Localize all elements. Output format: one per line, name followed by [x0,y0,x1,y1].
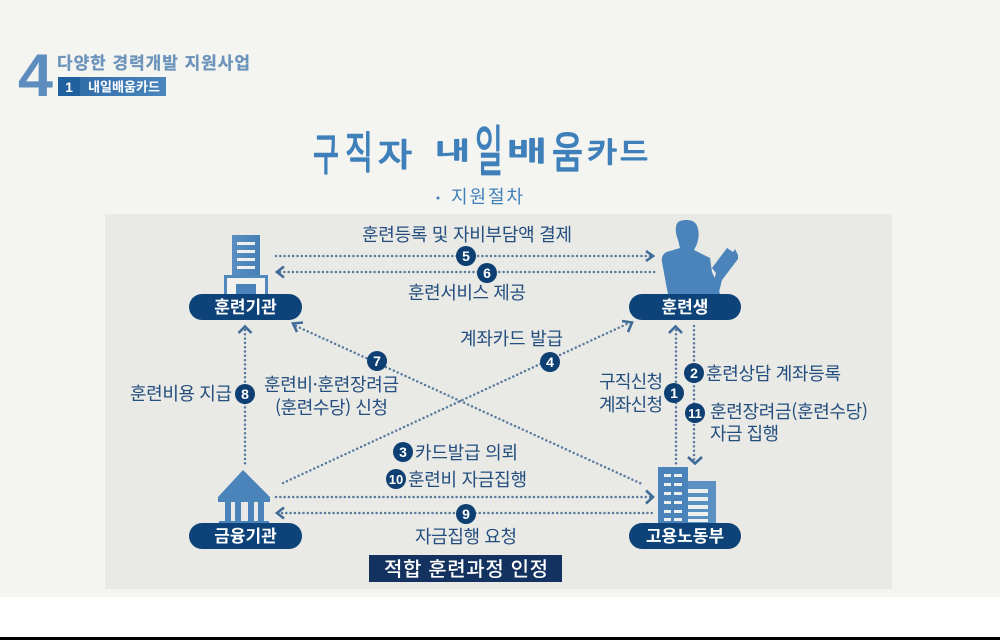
label pill: training institution: 훈련기관 [214,293,277,318]
label pill: trainee: 훈련생 [662,293,708,318]
step 9 label [415,504,517,549]
label pill: ministry of employment and labor: 고용노동부 [646,522,724,547]
arrow 5: institution to trainee [276,251,653,261]
step 3 label: 3 [399,444,407,460]
section header [18,42,250,109]
section heading: 다양한 경력개발 지원사업 [57,49,250,74]
step 7 label: 훈련비·훈련장려금 [264,371,399,397]
subtitle: 지원절차 [451,183,523,209]
step 11 label: 훈련장려금(훈련수당) [710,398,868,424]
step 1 label [599,368,684,417]
arrow 1: ministry to trainee [669,326,682,464]
step 10 label: 10 [389,472,403,487]
step 7 label: 7 [373,353,381,369]
label pill: ministry of employment and labor [629,522,741,549]
step 8 label: 훈련비용 지급 [130,380,232,406]
arrow 4: bank to trainee [283,321,632,483]
step 7 label [264,351,399,420]
title [313,107,648,187]
arrow 9: ministry to bank [277,508,655,518]
step 6 label: 6 [483,265,491,281]
step 1 label: 구직신청 [599,368,663,394]
bottom black strip [0,637,1000,640]
title: 움 [552,119,583,181]
title: 일 [475,107,503,187]
step 11 label [685,398,868,446]
label pill: training institution [189,293,302,320]
arrow 2 and 11: trainee to ministry [688,326,702,464]
arrow 8: bank to institution [238,326,252,464]
step 9 label: 9 [462,506,470,522]
label pill: trainee [629,293,741,320]
step 4 label: 계좌카드 발급 [460,325,563,351]
step 11 label: 자금 집행 [710,420,779,446]
title: 배 [507,130,547,169]
step 6 label: 훈련서비스 제공 [408,279,526,305]
subsection badge [58,76,166,96]
icon: ministry buildings [658,467,716,523]
panel: procedure diagram [105,214,892,589]
step 2 label: 2 [690,365,698,381]
title: 직 [345,117,373,181]
step 1 label: 1 [670,385,678,401]
subsection badge: 내일배움카드 [88,76,160,96]
label pill: financial institution: 금융기관 [214,522,277,547]
icon: training institution building [226,235,266,296]
step 1 label: 계좌신청 [599,391,663,417]
title: 내 [435,131,470,166]
arrow 10: bank to ministry [276,490,653,504]
step 3 label: 카드발급 의뢰 [415,439,518,465]
step 9 label: 자금집행 요청 [415,523,517,549]
title: 구 [313,119,339,183]
title: 드 [620,132,648,169]
step 4 label: 4 [546,354,554,370]
step 10 label: 훈련비 자금집행 [408,466,527,492]
step 2 label: 훈련상담 계좌등록 [706,360,841,386]
arrow 6: trainee to institution [277,266,655,278]
step 5 label: 훈련등록 및 자비부담액 결제 [362,221,572,247]
step 5 label [362,221,572,266]
icon: trainee silhouette [662,220,738,294]
step 4 label [460,325,563,372]
subsection badge: 1 [65,79,73,95]
arrow 7: ministry to institution [293,322,642,484]
icon: bank [218,470,270,523]
callout: approved training course: 적합 훈련과정 인정 [384,553,548,582]
step 11 label: 11 [688,406,702,421]
section number: 4 [18,42,54,109]
step 5 label: 5 [462,248,470,264]
step 8 label: 8 [241,386,249,402]
title: 카 [587,131,617,171]
step 6 label [408,263,526,305]
label pill: financial institution [189,522,302,549]
step 7 label: (훈련수당) 신청 [275,394,388,420]
title: 자 [378,130,412,176]
